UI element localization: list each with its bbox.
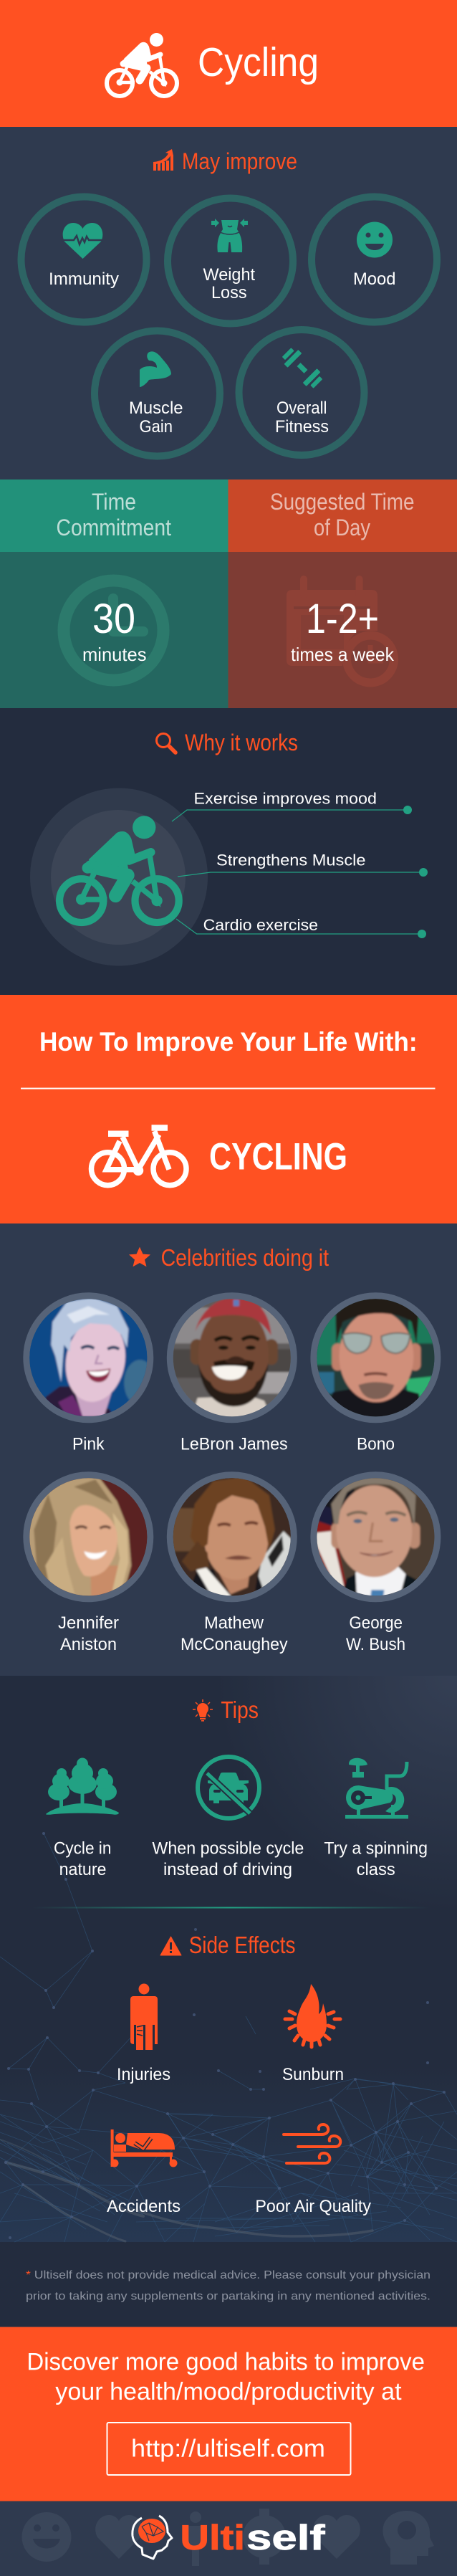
tip: cycle in nature	[46, 1757, 119, 1879]
heading: side effects	[160, 1932, 295, 1958]
benefit: overall fitness: Overall	[276, 399, 327, 418]
celebrity: Mathew McConaughey: Mathew	[204, 1613, 264, 1633]
tip: spinning class: class	[357, 1860, 395, 1879]
heading: tips: Tips	[221, 1697, 259, 1723]
value: 30 minutes	[82, 596, 146, 665]
celebrity: George W. Bush: W. Bush	[346, 1635, 405, 1654]
tip: cycle in nature: nature	[59, 1860, 106, 1879]
icon: clock watermark	[64, 581, 163, 680]
benefit: weight loss: Weight	[203, 265, 255, 285]
celebrity: George W. Bush	[311, 1472, 440, 1654]
icon: star	[129, 1247, 150, 1266]
benefit: immunity: Immunity	[49, 269, 119, 289]
side effect: accidents: Accidents	[107, 2197, 181, 2216]
celebrity: LeBron James: LeBron James	[181, 1434, 288, 1454]
background: network pattern	[0, 1833, 457, 2242]
celebrity: Jennifer Aniston: Jennifer	[58, 1613, 119, 1633]
disclaimer: * Ultiself does not provide medical advice. Please consult your physician	[26, 2269, 430, 2281]
value: 1-2+ times a week	[291, 596, 395, 665]
benefit: mood: Mood	[353, 269, 395, 289]
callout: cardio exercise: Cardio exercise	[203, 916, 318, 934]
value: 30 minutes: minutes	[82, 644, 146, 665]
side effect: sunburn	[282, 1984, 344, 2084]
callout: exercise improves mood: Exercise improves mood	[193, 790, 377, 807]
button: url	[107, 2423, 351, 2475]
heading: celebrities doing it: Celebrities doing it	[161, 1244, 329, 1271]
heading: why it works: Why it works	[185, 730, 298, 755]
heading: may improve: May improve	[182, 148, 297, 174]
benefit: mood	[312, 196, 437, 323]
panel: how to improve banner	[0, 995, 457, 1223]
icon: bicycle	[92, 1128, 186, 1186]
icon: light bulb	[193, 1699, 213, 1722]
callout: exercise improves mood	[172, 790, 412, 821]
footer background icons	[21, 2509, 434, 2566]
callout: cardio exercise	[176, 916, 426, 938]
icon: calendar watermark	[287, 579, 394, 682]
benefit: weight loss	[168, 198, 293, 324]
celebrity: Jennifer Aniston	[24, 1472, 153, 1654]
disclaimer	[26, 2269, 430, 2302]
panel: suggested time of day	[228, 480, 457, 708]
heading: suggested time of day: of Day	[314, 515, 370, 540]
celebrity: LeBron James	[168, 1293, 297, 1454]
panel: may improve	[0, 127, 457, 480]
heading: how to improve your life with: How To Improve Your Life With:	[39, 1027, 418, 1056]
tip: cycle in nature: Cycle in	[54, 1838, 111, 1858]
disclaimer: prior to taking any supplements or partaking in any mentioned activities.	[26, 2291, 430, 2302]
icon: magnifier	[156, 734, 175, 753]
benefit: muscle gain: Muscle	[129, 399, 183, 418]
side effect: injuries: Injuries	[117, 2065, 170, 2084]
celebrity: Jennifer Aniston: Aniston	[60, 1635, 117, 1654]
benefit: weight loss: Loss	[211, 283, 247, 302]
side effect: injuries	[117, 1984, 170, 2084]
label: cycling: CYCLING	[209, 1136, 347, 1178]
logo: Ultiself	[133, 2516, 325, 2559]
benefit: immunity	[21, 196, 146, 323]
value: 1-2+ times a week: 1-2+	[306, 596, 379, 642]
side effect: poor air quality	[255, 2124, 371, 2216]
benefit: overall fitness	[239, 330, 364, 455]
celebrity: Bono: Bono	[357, 1434, 395, 1454]
celebrity: Pink: Pink	[72, 1434, 105, 1454]
side effect: sunburn: Sunburn	[282, 2065, 344, 2084]
celebrity: Mathew McConaughey	[168, 1472, 297, 1654]
panel: footer	[0, 2501, 457, 2576]
text: discover more: Discover more good habits to improve	[27, 2348, 425, 2375]
title: Cycling	[198, 39, 319, 85]
benefit: muscle gain: Gain	[139, 417, 173, 437]
panel: celebrities	[23, 1247, 441, 1654]
celebrity: George W. Bush: George	[349, 1613, 403, 1633]
panel: header	[0, 0, 457, 127]
heading: suggested time of day: Suggested Time	[270, 489, 414, 515]
heading: time commitment: Commitment	[56, 515, 171, 540]
celebrity: Pink	[24, 1293, 155, 1454]
icon: cyclist in circle	[30, 788, 208, 966]
benefit: overall fitness: Fitness	[275, 417, 329, 437]
heading: suggested time of day	[270, 489, 414, 540]
text: discover more	[27, 2348, 425, 2405]
tip: cycle instead of driving	[152, 1757, 304, 1879]
heading: time commitment: Time	[92, 489, 136, 515]
panel: time commitment	[0, 480, 228, 708]
heading: time commitment	[56, 489, 171, 540]
value: 1-2+ times a week: times a week	[291, 644, 395, 665]
callout: strengthens muscle	[178, 851, 428, 877]
side effect: poor air quality: Poor Air Quality	[255, 2197, 371, 2216]
tip: spinning class: Try a spinning	[324, 1838, 428, 1858]
panel: why it works	[0, 708, 457, 995]
button: url: http://ultiself.com	[131, 2436, 325, 2463]
celebrity: Mathew McConaughey: McConaughey	[181, 1635, 288, 1654]
benefit: muscle gain	[95, 331, 220, 456]
heading: tips	[193, 1697, 259, 1723]
callout: strengthens muscle: Strengthens Muscle	[216, 851, 365, 869]
logo: Ultiself: Ulti	[180, 2519, 245, 2557]
heading: side effects: Side Effects	[189, 1932, 295, 1958]
tip: cycle instead of driving: When possible cycle	[152, 1838, 304, 1858]
icon: cyclist	[107, 33, 177, 96]
panel: tips and side effects	[0, 1676, 457, 2327]
panel: call to action	[0, 2327, 457, 2501]
tip: spinning class	[324, 1758, 428, 1879]
text: discover more: your health/mood/productivity at	[55, 2378, 402, 2405]
tip: cycle instead of driving: instead of driving	[163, 1860, 292, 1879]
side effect: accidents	[107, 2129, 181, 2216]
celebrity: Bono	[311, 1293, 440, 1454]
logo: Ultiself: self	[246, 2519, 325, 2557]
icon: rising chart	[153, 149, 173, 171]
value: 30 minutes: 30	[92, 596, 135, 642]
